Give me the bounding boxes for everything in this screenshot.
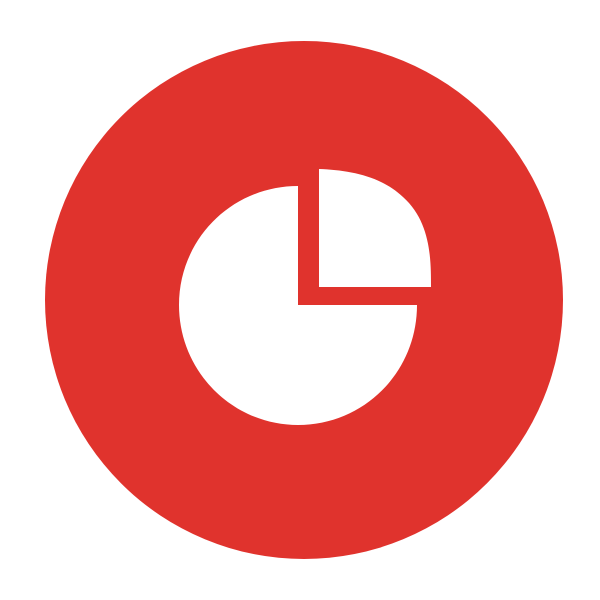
pie chart detached slice	[319, 169, 431, 287]
pie chart main body	[179, 186, 417, 425]
red circle background	[45, 41, 563, 559]
